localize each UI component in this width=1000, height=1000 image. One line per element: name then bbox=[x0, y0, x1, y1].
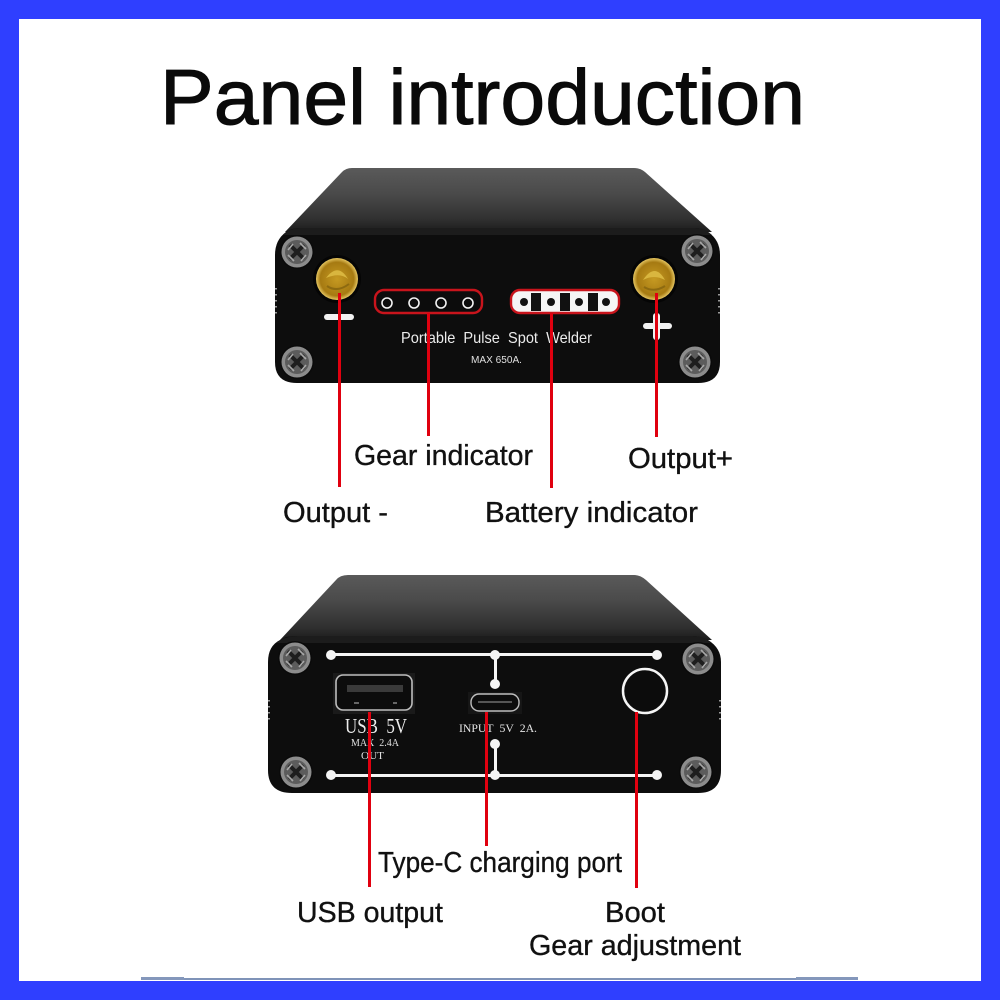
battery indicator bbox=[511, 290, 619, 313]
screws bbox=[280, 234, 714, 379]
label: usb output: USB output bbox=[297, 897, 443, 929]
title: Panel introduction bbox=[160, 53, 805, 141]
label: gear indicator: Gear indicator bbox=[354, 440, 533, 472]
label: output plus: Output+ bbox=[628, 443, 733, 475]
label: battery indicator: Battery indicator bbox=[485, 497, 698, 529]
callout lines top bbox=[338, 293, 658, 488]
plus sign bbox=[643, 313, 672, 340]
side notches bbox=[275, 288, 720, 314]
USB max print: MAX 2.4A bbox=[351, 737, 399, 749]
USB print: USB 5V bbox=[345, 714, 407, 738]
USB-C port bbox=[468, 692, 522, 714]
label: gear adjustment: Gear adjustment bbox=[529, 930, 741, 962]
label: type-c charging port: Type-C charging port bbox=[378, 847, 622, 879]
device: front panel bbox=[275, 168, 720, 383]
top face bbox=[285, 168, 712, 232]
label: output minus: Output - bbox=[283, 497, 388, 529]
gear indicator LEDs bbox=[375, 290, 482, 313]
panel print: Portable Pulse Spot Welder bbox=[401, 330, 593, 347]
upper front bevel bbox=[276, 636, 711, 643]
input print: INPUT 5V 2A. bbox=[459, 721, 537, 735]
top face bbox=[280, 575, 712, 640]
top bus line bbox=[326, 650, 662, 689]
max current print: MAX 650A. bbox=[471, 355, 522, 366]
positive terminal bbox=[630, 255, 678, 303]
callout lines bottom bbox=[368, 712, 638, 888]
minus sign bbox=[324, 314, 354, 320]
device: rear panel bbox=[268, 575, 721, 793]
bottom bus line bbox=[326, 739, 662, 780]
negative terminal bbox=[313, 255, 361, 303]
side notches bbox=[268, 700, 721, 720]
front face bbox=[268, 636, 721, 793]
screws bbox=[278, 641, 715, 789]
bottom edge line bbox=[141, 977, 858, 980]
upper front bevel bbox=[283, 228, 712, 235]
USB out print: OUT bbox=[361, 750, 384, 762]
USB port bbox=[333, 673, 415, 714]
front face bbox=[275, 228, 720, 383]
label: boot: Boot bbox=[605, 897, 665, 929]
power button bbox=[623, 669, 667, 713]
